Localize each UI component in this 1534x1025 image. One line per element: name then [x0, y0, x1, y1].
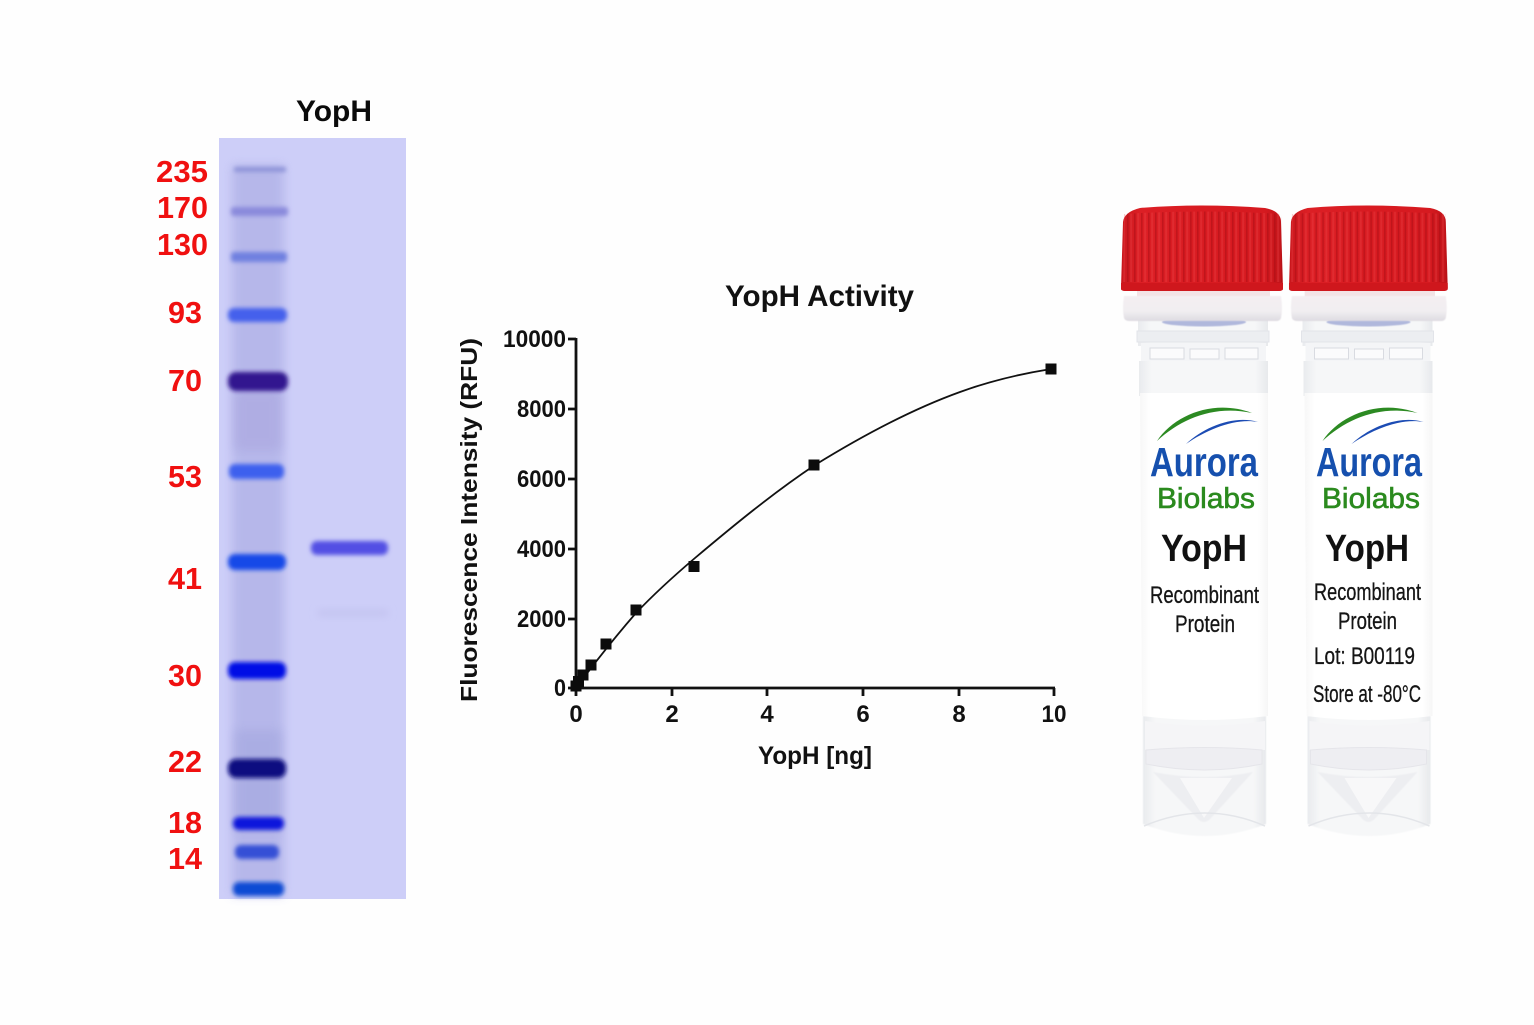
label product name: YopH [1325, 528, 1409, 570]
panel: SDS-PAGE gel [156, 95, 406, 899]
molecular weight labels: 53 [168, 459, 202, 494]
y tick labels: 0 [554, 675, 566, 702]
x tick labels: 0 [569, 701, 583, 728]
logo swooshes [1157, 408, 1258, 444]
x tick labels: 4 [760, 701, 774, 728]
logo: Aurora: Aurora [1316, 439, 1423, 485]
marker bands [228, 167, 288, 896]
molecular weight labels: 70 [168, 363, 202, 398]
y tick labels: 10000 [503, 326, 566, 353]
x tick labels: 2 [665, 701, 679, 728]
label description: Recombinant [1150, 582, 1259, 609]
logo: Biolabs: Biolabs [1157, 483, 1255, 515]
label description: Recombinant [1314, 579, 1421, 606]
gel background [219, 138, 406, 899]
chart title: YopH Activity [725, 280, 914, 313]
product vial: left [1121, 206, 1283, 836]
marker lane smear [232, 165, 284, 895]
molecular weight labels [156, 154, 208, 876]
fitted curve [576, 369, 1051, 688]
label description: Lot: B00119 [1314, 643, 1415, 670]
x tick labels: 10 [1042, 701, 1066, 728]
product vial: right [1289, 206, 1448, 836]
label description: Protein [1175, 611, 1235, 638]
y tick labels: 2000 [517, 606, 566, 633]
chart: YopH Activity [456, 280, 1066, 770]
axes [568, 338, 1055, 696]
y tick labels [503, 326, 566, 702]
red cap and collar [1289, 206, 1448, 321]
logo: Biolabs: Biolabs [1322, 483, 1420, 515]
vial body [1137, 318, 1269, 836]
label product name: YopH [1161, 528, 1247, 570]
x tick labels: 6 [856, 701, 870, 728]
logo: Aurora: Aurora [1150, 439, 1259, 485]
data points [570, 364, 1056, 692]
faint minor band [318, 610, 388, 616]
gel heading: YopH [296, 95, 372, 128]
molecular weight labels: 30 [168, 658, 202, 693]
molecular weight labels: 170 [157, 190, 208, 225]
molecular weight labels: 41 [168, 561, 202, 596]
x tick labels: 8 [952, 701, 966, 728]
molecular weight labels: 130 [157, 227, 208, 262]
vial body [1302, 318, 1434, 836]
label description: Store at -80°C [1313, 681, 1421, 708]
y axis title: Fluorescence Intensity (RFU) [456, 338, 482, 702]
y tick labels: 8000 [517, 396, 566, 423]
logo swooshes [1322, 408, 1424, 444]
molecular weight labels: 22 [168, 744, 202, 779]
label description [1313, 579, 1421, 708]
YopH sample band [311, 541, 388, 555]
y tick labels: 6000 [517, 466, 566, 493]
x axis title: YopH [ng] [758, 742, 872, 770]
label description: Protein [1338, 608, 1397, 635]
x tick labels [569, 701, 1066, 728]
molecular weight labels: 18 [168, 805, 202, 840]
label description [1150, 582, 1259, 638]
molecular weight labels: 93 [168, 295, 202, 330]
red cap and collar [1121, 206, 1283, 321]
molecular weight labels: 14 [168, 841, 203, 876]
molecular weight labels: 235 [156, 154, 208, 189]
y tick labels: 4000 [517, 536, 566, 563]
